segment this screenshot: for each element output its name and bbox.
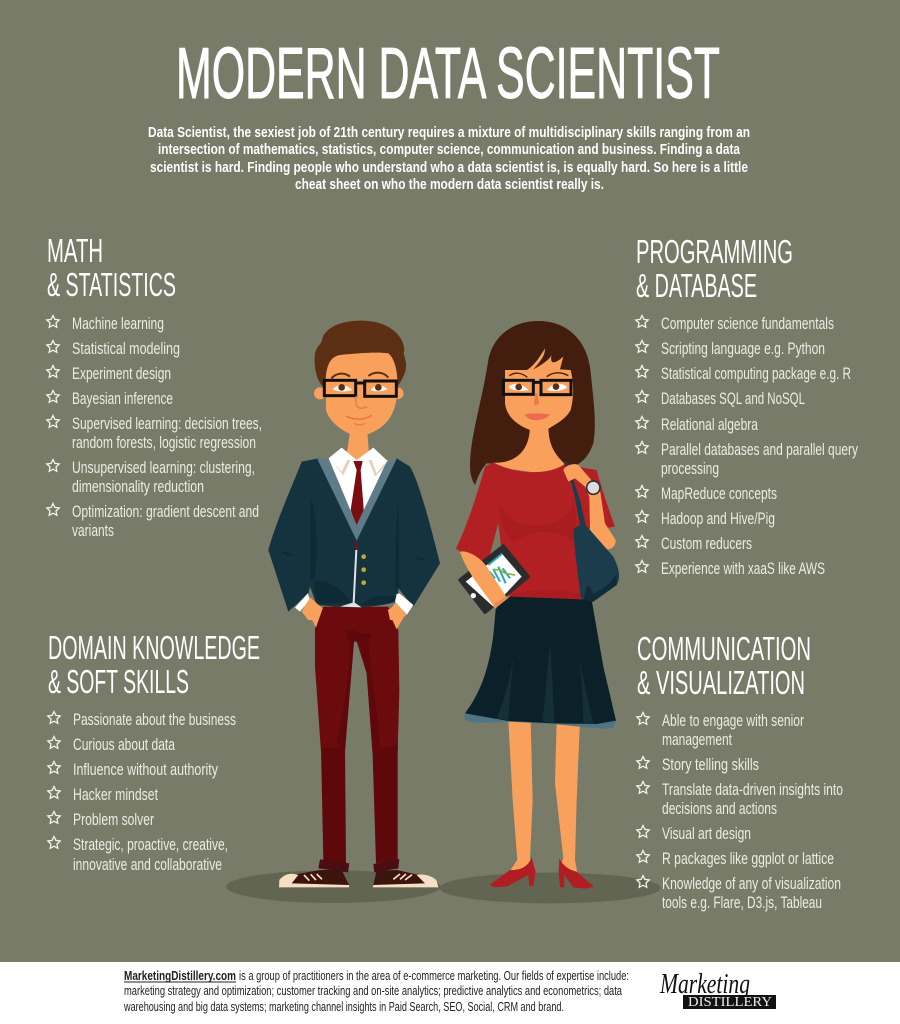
intro paragraph: Data Scientist, the sexiest job of 21th century requires a mixture of multidisciplinary skills ranging from an [148, 125, 750, 141]
heading: domain knowledge and soft skills: & SOFT SKILLS [48, 663, 189, 700]
list: domain skills: Problem solver [73, 810, 154, 829]
list: programming skills: Experience with xaaS like AWS [661, 559, 825, 578]
intro paragraph: cheat sheet on who the modern data scientist really is. [295, 177, 604, 193]
footer text: is a group of practitioners in the area of e-commerce marketing. Our fields of expertise include: [239, 969, 629, 983]
footer text [123, 969, 629, 1014]
list: domain skills: innovative and collaborative [73, 855, 222, 874]
list: communication skills: management [662, 730, 732, 749]
list: math skills: Unsupervised learning: clustering, [72, 458, 255, 477]
panel: math and statistics [47, 232, 262, 540]
list: domain skills: Hacker mindset [73, 785, 158, 804]
list: communication skills: Able to engage with senior [662, 711, 804, 730]
list: math skills: Optimization: gradient descent and [72, 502, 259, 521]
list: math skills: dimensionality reduction [72, 477, 204, 496]
list: communication skills: tools e.g. Flare, D3.js, Tableau [662, 893, 822, 912]
list: communication skills: Visual art design [662, 824, 751, 843]
man: upper body [268, 321, 440, 620]
woman: upper body [456, 321, 619, 620]
heading: programming and database [636, 233, 793, 304]
logo: Marketing Distillery: DISTILLERY [688, 994, 772, 1009]
list: programming skills: MapReduce concepts [661, 484, 777, 503]
list: programming skills: processing [661, 459, 719, 478]
list: programming skills: Databases SQL and NoSQL [661, 389, 805, 408]
footer text: warehousing and big data systems; marketing channel insights in Paid Search, SEO, Social, CRM and brand. [123, 1000, 564, 1014]
list: math skills: Supervised learning: decision trees, [72, 414, 262, 433]
list: domain skills: Influence without authority [73, 760, 218, 779]
list: communication skills: R packages like ggplot or lattice [662, 849, 834, 868]
illustration: ground shadows [226, 870, 661, 903]
list: math skills [47, 314, 262, 540]
heading: math and statistics [47, 232, 176, 303]
list: communication skills [637, 711, 843, 912]
list: math skills: Statistical modeling [72, 339, 180, 358]
list: domain skills: Curious about data [73, 735, 175, 754]
illustration: woman [456, 321, 619, 889]
list: programming skills: Computer science fundamentals [661, 314, 834, 333]
list: math skills: random forests, logistic regression [72, 433, 256, 452]
illustration: man [268, 321, 440, 887]
footer text: MarketingDistillery.com [124, 969, 236, 983]
man: legs and shoes [279, 600, 438, 887]
list: domain skills: Passionate about the business [73, 710, 236, 729]
list: programming skills [636, 314, 858, 578]
heading: domain knowledge and soft skills [48, 629, 260, 700]
heading: communication and visualization [637, 630, 811, 701]
list: programming skills: Scripting language e.g. Python [661, 339, 825, 358]
footer text: marketing strategy and optimization; customer tracking and on-site analytics; predictive analytics and econometrics; data [124, 984, 622, 998]
heading: programming and database: PROGRAMMING [636, 233, 793, 270]
logo: Marketing Distillery: Marketing [659, 969, 750, 1000]
heading: domain knowledge and soft skills: DOMAIN KNOWLEDGE [48, 629, 260, 666]
list: math skills: Machine learning [72, 314, 164, 333]
list: communication skills: Story telling skills [662, 755, 759, 774]
heading: programming and database: & DATABASE [636, 267, 757, 304]
footer panel [0, 962, 900, 1024]
heading: math and statistics: & STATISTICS [47, 266, 176, 303]
list: math skills: Bayesian inference [72, 389, 173, 408]
panel: domain knowledge and soft skills [48, 629, 260, 874]
intro paragraph: intersection of mathematics, statistics, computer science, communication and business. Finding a data [158, 142, 741, 158]
intro paragraph [148, 125, 750, 193]
heading: math and statistics: MATH [47, 232, 103, 269]
panel: communication and visualization [637, 630, 843, 912]
list: communication skills: decisions and actions [662, 799, 777, 818]
list: programming skills: Relational algebra [661, 415, 758, 434]
list: domain skills [48, 710, 236, 874]
list: domain skills: Strategic, proactive, creative, [73, 835, 228, 854]
intro paragraph: scientist is hard. Finding people who understand who a data scientist is, is equally hard. So here is a little [150, 160, 748, 176]
list: programming skills: Hadoop and Hive/Pig [661, 509, 775, 528]
panel: programming and database [636, 233, 858, 578]
list: math skills: variants [72, 521, 114, 540]
woman: legs, skirt and shoes [464, 600, 616, 889]
list: programming skills: Custom reducers [661, 534, 752, 553]
woman: tablet [460, 546, 528, 612]
list: math skills: Experiment design [72, 364, 171, 383]
